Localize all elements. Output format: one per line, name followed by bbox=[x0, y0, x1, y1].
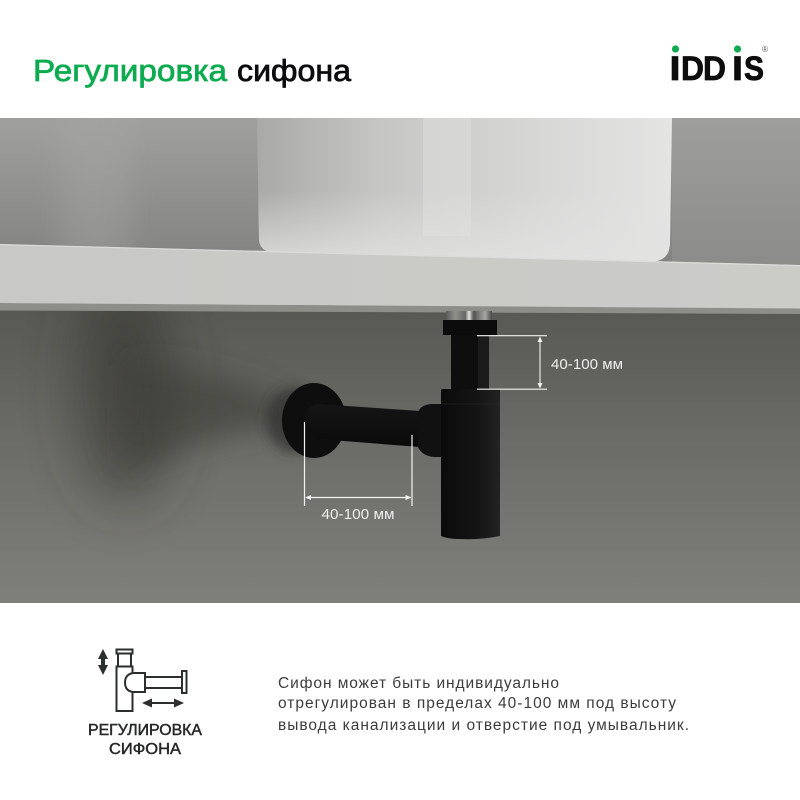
icon caption bbox=[88, 722, 203, 758]
logo: IDDIS: D bbox=[703, 50, 726, 88]
product: black bottle siphon bbox=[282, 311, 500, 539]
logo: IDDIS: ® bbox=[762, 45, 768, 54]
upper wall bbox=[0, 118, 800, 278]
title: Регулировка bbox=[33, 53, 228, 88]
siphon outline bbox=[116, 650, 186, 711]
dimension: horizontal 40-100 мм: 40-100 мм bbox=[322, 506, 394, 523]
arrow: vertical double bbox=[98, 649, 108, 675]
chrome thread bbox=[446, 311, 492, 321]
icon caption: РЕГУЛИРОВКА bbox=[88, 722, 203, 739]
title: сифона bbox=[237, 53, 352, 88]
icon: siphon adjustment bbox=[98, 649, 186, 711]
logo: IDDIS: I bbox=[732, 50, 743, 88]
description text: Сифон может быть индивидуально bbox=[278, 675, 559, 692]
logo: IDDIS: S bbox=[744, 50, 764, 88]
upper pipe bbox=[451, 335, 489, 390]
photo: vanity shelf and wall bbox=[0, 118, 800, 603]
dimension: vertical 40-100 мм: 40-100 мм bbox=[551, 356, 623, 373]
description text: вывода канализации и отверстие под умывальник. bbox=[278, 717, 689, 734]
description text bbox=[278, 675, 689, 734]
basin bbox=[257, 118, 672, 262]
wall flange bbox=[282, 383, 346, 458]
title bbox=[33, 53, 352, 88]
arrow: horizontal double bbox=[142, 698, 184, 708]
elbow bbox=[418, 404, 442, 457]
icon caption: СИФОНА bbox=[109, 741, 182, 758]
bottle body bbox=[441, 389, 500, 539]
lower wall bbox=[0, 305, 800, 603]
logo: IDDIS: D bbox=[681, 50, 704, 88]
horizontal arm bbox=[306, 404, 420, 447]
nut bbox=[443, 320, 497, 335]
logo: IDDIS: I bbox=[670, 50, 680, 88]
dimension: horizontal 40-100 мм bbox=[304, 422, 412, 523]
shelf bbox=[0, 244, 800, 314]
description text: отрегулирован в пределах 40-100 мм под высоту bbox=[278, 695, 676, 712]
dimension: vertical 40-100 мм bbox=[477, 336, 623, 389]
logo: IDDIS bbox=[670, 45, 768, 88]
